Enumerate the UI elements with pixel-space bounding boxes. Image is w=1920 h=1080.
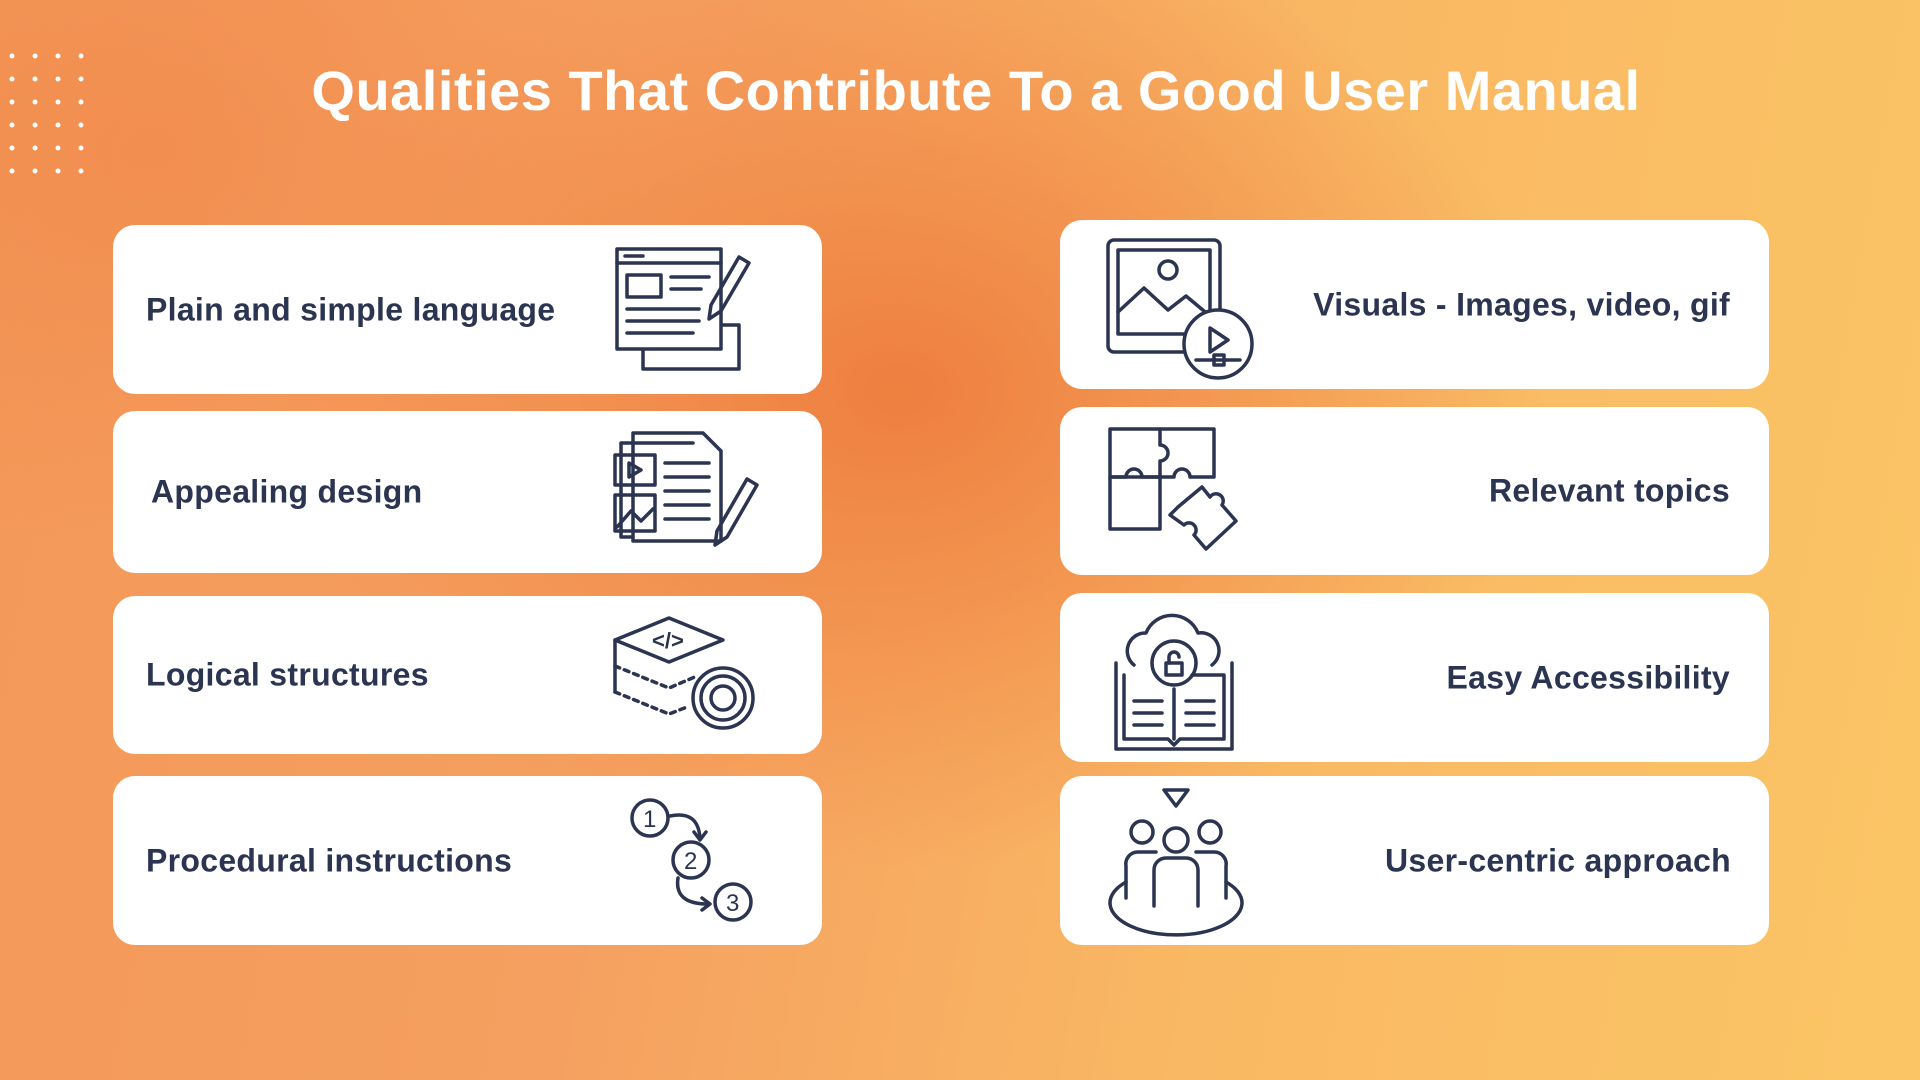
card: Plain and simple language bbox=[113, 225, 822, 394]
icon: document with pencil bbox=[615, 247, 751, 371]
icon: layers with gear bbox=[613, 616, 755, 730]
icon: numbered steps: 3 bbox=[726, 890, 739, 917]
icon: numbered steps: 2 bbox=[684, 848, 697, 875]
decorative dot grid bbox=[10, 54, 84, 174]
card: Easy Accessibility: Easy Accessibility bbox=[1446, 659, 1730, 695]
card: Plain and simple language: Plain and simple language bbox=[146, 291, 555, 327]
card: Relevant topics: Relevant topics bbox=[1489, 472, 1730, 508]
icon: numbered steps bbox=[630, 798, 753, 922]
card: Visuals bbox=[1060, 220, 1769, 389]
title: Qualities That Contribute To a Good User Manual bbox=[311, 59, 1641, 122]
card: Visuals: Visuals - Images, video, gif bbox=[1313, 286, 1730, 322]
icon: image with video play bbox=[1106, 238, 1254, 380]
card: Logical structures: Logical structures bbox=[146, 656, 429, 692]
icon: numbered steps: 1 bbox=[643, 806, 656, 833]
card: Easy Accessibility bbox=[1060, 593, 1769, 762]
card: Appealing design: Appealing design bbox=[151, 474, 422, 510]
card: User-centric approach: User-centric approach bbox=[1385, 842, 1731, 878]
card: Logical structures bbox=[113, 596, 822, 754]
card: Appealing design bbox=[113, 411, 822, 573]
card: Relevant topics bbox=[1060, 407, 1769, 575]
icon: layers with gear: </> bbox=[652, 628, 684, 653]
card: User-centric approach bbox=[1060, 776, 1769, 945]
icon: book with cloud lock bbox=[1114, 614, 1234, 751]
card: Procedural instructions bbox=[113, 776, 822, 945]
icon: group of users bbox=[1108, 788, 1244, 937]
card: Procedural instructions: Procedural instructions bbox=[146, 842, 512, 878]
icon: puzzle bbox=[1108, 427, 1238, 551]
icon: design document bbox=[613, 431, 759, 547]
